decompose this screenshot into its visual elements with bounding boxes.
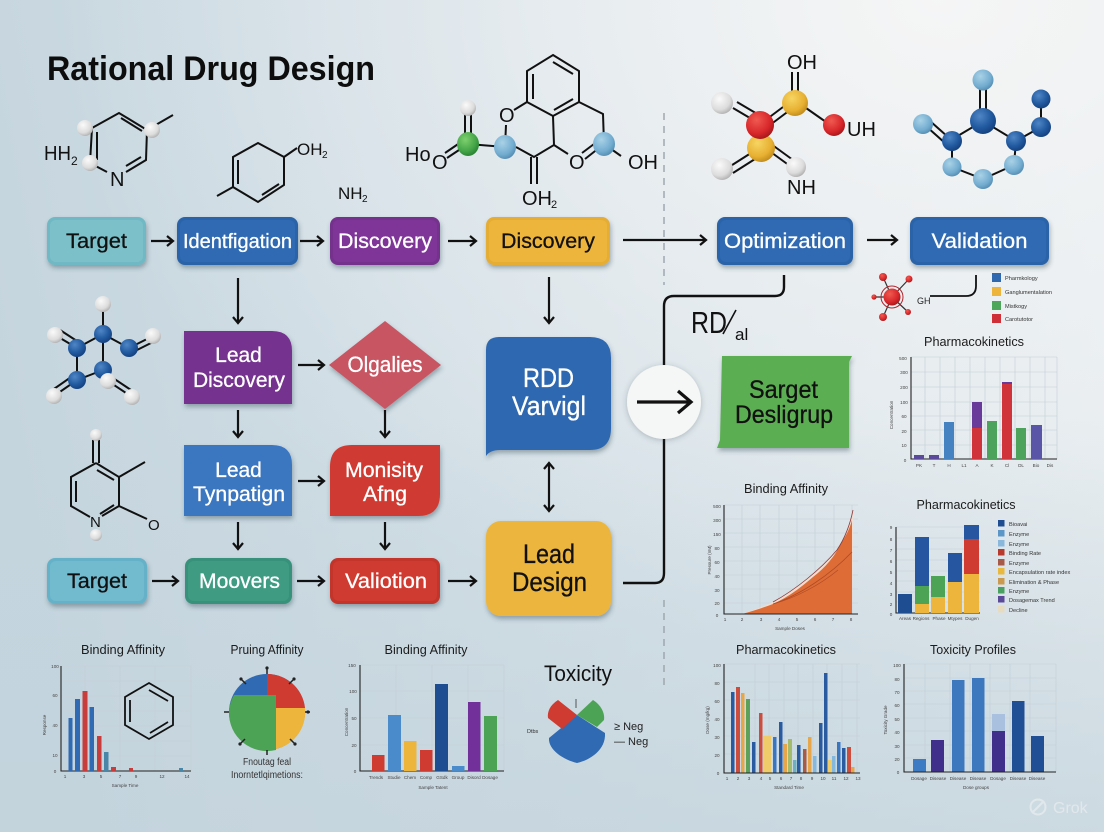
chart: stacked pharmacokinetics with legend: 5 (890, 570, 893, 575)
molecule: fused ring with coloured atoms: O (569, 152, 585, 174)
chart: binding affinity area: 150 (713, 532, 721, 537)
flow box: Target: Target (66, 230, 127, 253)
flow box: Discovery purple (330, 217, 440, 265)
stacked chart legend: Enzyme (1009, 589, 1029, 595)
chart: toxicity profiles: 100 (893, 663, 901, 668)
flow box: Validation: Validation (932, 230, 1028, 253)
chart: pharmacokinetics upper right: Cl (1005, 463, 1009, 468)
stacked chart legend: Binding Rate (1009, 551, 1041, 557)
molecule: fused ring with coloured atoms: OH (522, 188, 552, 210)
chart: toxicity pie (527, 661, 648, 763)
chart: binding affinity area: 500 (713, 504, 721, 509)
chart: toxicity pie: — Neg (614, 736, 648, 748)
chart: toxicity profiles: Disease (1029, 776, 1046, 781)
chart: toxicity profiles: 30 (894, 744, 900, 749)
chart: binding affinity bars with ring: 12 (159, 774, 165, 779)
chart: binding affinity bars: Binding Affinity (384, 643, 468, 657)
flow decision: Olgalies (329, 321, 441, 409)
molecule: pyridine lower: N (90, 514, 101, 531)
chart: toxicity profiles: 80 (894, 677, 900, 682)
stacked chart legend: Decline (1009, 608, 1028, 614)
chart: toxicity profiles: 0 (897, 770, 900, 775)
chart: binding affinity bars: Disord (467, 775, 481, 780)
flow box: Lead Tynpatign: Tynpatign (193, 483, 285, 506)
flow box: Monisity Afng: Afng (363, 483, 407, 506)
chart: pie pruning affinity (224, 643, 310, 781)
chart: binding affinity area: 4 (778, 617, 781, 622)
chart: pharmacokinetics upper right (889, 335, 1057, 468)
chart: binding affinity bars with ring: 5 (100, 774, 103, 779)
flow box: Discovery yellow: Discovery (501, 230, 596, 253)
chart: binding affinity bars with ring: 9 (135, 774, 138, 779)
chart title: Binding Affinity (81, 643, 166, 657)
chart: pharmacokinetics bottom: 60 (714, 699, 720, 704)
molecule: red and yellow atoms: UH (847, 119, 876, 141)
molecule: fused ring with coloured atoms: Ho (405, 144, 431, 166)
flow box: Identification (177, 217, 298, 265)
title: Rational Drug Design (47, 50, 375, 88)
chart: pharmacokinetics bottom: 0 (717, 771, 720, 776)
flow box: Sarget Desligrup: Sarget (749, 376, 818, 404)
chart: pharmacokinetics upper right: 300 (900, 370, 908, 375)
chart: binding affinity area: 5 (796, 617, 799, 622)
chart: stacked pharmacokinetics with legend: 3 (890, 592, 893, 597)
flow box: Discovery yellow (486, 217, 610, 265)
stacked chart legend: Enzyme (1009, 542, 1029, 548)
chart: binding affinity bars: 100 (349, 689, 357, 694)
chart: stacked pharmacokinetics with legend (890, 498, 1070, 621)
chart: stacked pharmacokinetics with legend: Areas (899, 616, 912, 621)
chart: pharmacokinetics upper right: A (975, 463, 979, 468)
chart: binding affinity bars with ring: 10 (52, 753, 58, 758)
flow box: Monisity Afng (330, 445, 440, 516)
chart: pie pruning affinity: Pruing Affinity (230, 643, 304, 657)
chart: stacked pharmacokinetics with legend: 6 (890, 559, 893, 564)
molecule: fused ring with coloured atoms (405, 55, 658, 211)
chart: toxicity profiles: Dosage (990, 776, 1006, 781)
chart: pharmacokinetics bottom: 2 (737, 776, 740, 781)
chart: binding affinity bars with ring: 1 (64, 774, 67, 779)
chart: pharmacokinetics bottom: 13 (855, 776, 861, 781)
chart: binding affinity area: 3 (760, 617, 763, 622)
chart: pharmacokinetics bottom: 40 (714, 717, 720, 722)
chart: pharmacokinetics upper right: 200 (900, 385, 908, 390)
chart: pharmacokinetics upper right: 10 (901, 443, 907, 448)
chart: pharmacokinetics bottom: 20 (714, 753, 720, 758)
chart: stacked pharmacokinetics with legend: Mtypes (948, 616, 963, 621)
chart: binding affinity bars: 150 (348, 663, 356, 668)
chart: pharmacokinetics bottom: 30 (714, 735, 720, 740)
chart: pharmacokinetics upper right: Dis (1047, 463, 1054, 468)
flow box: Lead Tynpatign: Lead (215, 459, 262, 482)
chart: binding affinity area: 80 (714, 546, 720, 551)
stacked chart legend: Bioavai (1009, 522, 1027, 528)
arrows between flow boxes (151, 240, 897, 581)
chart: pie pruning affinity: Inorntetlqimetions: (231, 770, 303, 781)
legend: validation: Carotutotor (1005, 317, 1033, 323)
label: NH2: NH (338, 184, 363, 203)
molecule: red and yellow atoms (711, 52, 876, 199)
chart: pharmacokinetics bottom: Pharmacokinetics (736, 643, 836, 657)
chart: pharmacokinetics bottom: 8 (800, 776, 803, 781)
watermark: Grok (1030, 800, 1089, 817)
chart: binding affinity bars: 50 (351, 716, 357, 721)
chart: binding affinity bars with ring: 40 (52, 723, 58, 728)
chart: binding affinity bars: Dosage (482, 775, 498, 780)
chart: binding affinity bars with ring: 60 (52, 693, 58, 698)
legend: validation: Ganglumentalation (1005, 290, 1052, 296)
chart: stacked pharmacokinetics with legend: 9 (890, 525, 893, 530)
chart: pharmacokinetics bottom: 9 (811, 776, 814, 781)
flow box: Lead Design: Lead (523, 539, 575, 569)
molecule: red and yellow atoms: NH (787, 177, 816, 199)
chart: stacked pharmacokinetics with legend: Pharmacokinetics (916, 498, 1016, 512)
chart: pharmacokinetics bottom: 80 (714, 681, 720, 686)
molecule: fused ring with coloured atoms: OH (628, 152, 658, 174)
dashed divider lower (663, 600, 665, 688)
flow box: Discovery purple: Discovery (338, 230, 433, 253)
chart: toxicity profiles: Disease (950, 776, 967, 781)
chart: binding affinity bars with ring: 3 (83, 774, 86, 779)
chart: binding affinity area: 40 (714, 574, 720, 579)
chart: pharmacokinetics upper right: K (990, 463, 994, 468)
chart: binding affinity area (707, 482, 858, 631)
chart: binding affinity area: 300 (713, 518, 721, 523)
flow box: Lead Discovery (184, 331, 292, 404)
chart: binding affinity bars: Studie (387, 775, 401, 780)
chart: pharmacokinetics upper right: 20 (901, 429, 907, 434)
chart: pharmacokinetics bottom: 5 (769, 776, 772, 781)
chart: pie pruning affinity: Fnoutag feal (243, 757, 291, 768)
chart: binding affinity bars with ring: 100 (51, 664, 59, 669)
chart: stacked pharmacokinetics with legend: Regions (913, 616, 930, 621)
flow box: Target lower: Target (67, 570, 127, 593)
label: NH2: 2 (362, 194, 368, 205)
flow box: Monisity Afng: Monisity (345, 459, 423, 482)
chart: toxicity pie: Dtbs (527, 729, 539, 735)
chart: pharmacokinetics upper right: Concentration (889, 400, 894, 429)
molecule: pyridine with white atoms (44, 113, 173, 191)
chart: pharmacokinetics upper right: 0 (904, 458, 907, 463)
stacked chart legend: Enzyme (1009, 532, 1029, 538)
chart: toxicity profiles: Dosage (911, 776, 927, 781)
circle arrow (627, 365, 701, 439)
dashed divider upper (663, 113, 665, 285)
connector: molecule to validation (930, 275, 976, 296)
legend: validation (992, 273, 1052, 323)
chart: toxicity profiles: Disease (930, 776, 947, 781)
chart: binding affinity bars: Chem (404, 775, 416, 780)
chart: pharmacokinetics bottom: Dose (mg/kg) (705, 706, 710, 734)
molecule: cyclohexadiene with OH2 (217, 140, 328, 202)
flow box: Optimization: Optimization (724, 230, 846, 253)
chart: binding affinity bars: Sample Tatent (418, 785, 448, 790)
molecule: small red: GH (917, 296, 930, 306)
flow box: Target lower (47, 558, 147, 604)
chart: binding affinity bars with ring: Sample Time (112, 783, 139, 788)
chart: toxicity profiles: Toxicity Profiles (930, 643, 1016, 657)
flow box: Sarget Desligrup (717, 356, 852, 448)
chart: binding affinity bars: 20 (351, 743, 357, 748)
chart: binding affinity area: 30 (714, 588, 720, 593)
flow box: RDD Varvigl: Varvigl (512, 391, 586, 421)
chart: pharmacokinetics upper right: PK (916, 463, 923, 468)
molecule: small red (871, 273, 930, 321)
chart: binding affinity bars with ring: 14 (184, 774, 190, 779)
chart: binding affinity area: 2 (741, 617, 744, 622)
chart: pharmacokinetics bottom: 1 (726, 776, 729, 781)
flow box: Identification: Identfigation (183, 231, 292, 253)
molecule: fused ring with coloured atoms: O (499, 105, 515, 127)
molecule: blue ring (913, 70, 1051, 189)
chart: pharmacokinetics bottom: 7 (790, 776, 793, 781)
chart: binding affinity area: 7 (832, 617, 835, 622)
flow box: RDD Varvigl: RDD (523, 363, 574, 393)
flow box: Lead Design (486, 521, 611, 616)
chart: binding affinity bars: 0 (354, 769, 357, 774)
chart: pharmacokinetics bottom: 3 (748, 776, 751, 781)
label: RD al: al (735, 325, 748, 344)
chart: binding affinity area: 1 (724, 617, 727, 622)
chart: stacked pharmacokinetics with legend: Dugen (965, 616, 979, 621)
chart: toxicity pie: ≥ Neg (614, 721, 643, 733)
chart: pharmacokinetics upper right: DL (1018, 463, 1024, 468)
flow box: Lead Discovery: Lead (215, 344, 262, 367)
molecule: pyridine lower (71, 429, 160, 541)
chart: toxicity profiles: Disease (1010, 776, 1027, 781)
chart: binding affinity bars: GSdk (436, 775, 448, 780)
chart: stacked pharmacokinetics with legend: Phase (932, 616, 946, 621)
stacked chart legend: Encapsulation rate index (1009, 570, 1070, 576)
chart: pharmacokinetics bottom: 10 (820, 776, 826, 781)
flow box: RDD Varvigl (486, 337, 611, 456)
ring molecule (125, 683, 173, 739)
chart: stacked pharmacokinetics with legend: 8 (890, 537, 893, 542)
watermark: Grok: Grok (1053, 800, 1089, 817)
chart: pharmacokinetics upper right: L1 (961, 463, 967, 468)
flow box: Lead Design: Design (512, 567, 587, 597)
chart: pharmacokinetics bottom: 12 (843, 776, 849, 781)
molecule: pyridine with white atoms: HH (44, 143, 71, 165)
chart: stacked pharmacokinetics with legend: 4 (890, 581, 893, 586)
stacked chart legend: Enzyme (1009, 561, 1029, 567)
chart: pharmacokinetics upper right: 500 (899, 356, 907, 361)
chart: toxicity profiles: Disease (970, 776, 987, 781)
chart: binding affinity bars: Comp (420, 775, 433, 780)
flow box: Valiotion: Valiotion (345, 570, 427, 593)
flow decision: Olgalies: Olgalies (348, 352, 422, 377)
chart: pharmacokinetics bottom: Standard Time (774, 785, 804, 790)
chart: pharmacokinetics bottom: 4 (760, 776, 763, 781)
chart: binding affinity bars (344, 643, 504, 790)
flow box: Valiotion (330, 558, 440, 604)
flow box: Target (47, 217, 146, 265)
flow box: Sarget Desligrup: Desligrup (735, 401, 833, 429)
legend: validation: Pharmkology (1005, 276, 1038, 282)
chart: binding affinity area: Pressure (nM) (707, 545, 712, 575)
chart: toxicity pie: Toxicity (544, 661, 612, 686)
chart: binding affinity area: 20 (714, 601, 720, 606)
flow box: Moovers: Moovers (199, 570, 280, 593)
chart: stacked pharmacokinetics with legend: 0 (890, 612, 893, 617)
chart: toxicity profiles: 40 (894, 730, 900, 735)
flow box: Validation (910, 217, 1049, 265)
stacked chart legend: Elimination & Phase (1009, 580, 1059, 586)
chart: stacked pharmacokinetics with legend: 7 (890, 548, 893, 553)
chart: binding affinity bars: Trends (369, 775, 384, 780)
chart: binding affinity area: 8 (850, 617, 853, 622)
chart: toxicity profiles: Dose groups (963, 785, 990, 790)
chart: binding affinity area: Binding Affinity (744, 482, 829, 496)
flow box: Optimization (717, 217, 853, 265)
flow box: Lead Tynpatign (184, 445, 292, 516)
label: RD al: RD (691, 305, 727, 340)
chart: toxicity profiles: 70 (894, 690, 900, 695)
chart: pharmacokinetics upper right: Pharmacokinetics (924, 335, 1024, 349)
molecule: pyridine lower: O (148, 517, 160, 534)
chart: toxicity profiles: 60 (894, 703, 900, 708)
connector line: optimization to lead design (623, 275, 784, 583)
chart: binding affinity bars: Concentration (344, 707, 349, 736)
chart: toxicity profiles: 20 (894, 757, 900, 762)
chart: toxicity profiles: Toxicity Grade (883, 705, 888, 735)
flow box: Lead Discovery: Discovery (193, 369, 285, 392)
chart: binding affinity bars with ring: Response (42, 714, 47, 735)
chart: binding affinity bars with ring: 0 (54, 769, 57, 774)
chart: pharmacokinetics upper right: 100 (900, 400, 908, 405)
molecule: blue and white left (46, 296, 161, 405)
molecule: cyclohexadiene with OH2: OH (297, 140, 322, 159)
chart: toxicity profiles: 50 (894, 717, 900, 722)
chart: pharmacokinetics upper right: H (947, 463, 951, 468)
molecule: pyridine with white atoms: N (110, 169, 124, 191)
chart: toxicity profiles (883, 643, 1056, 790)
chart: binding affinity area: Sample Doses (775, 626, 806, 631)
molecule: fused ring with coloured atoms: 2 (551, 199, 557, 211)
molecule: pyridine with white atoms: 2 (71, 154, 78, 168)
chart: pharmacokinetics bottom: 6 (780, 776, 783, 781)
flow box: Moovers (185, 558, 292, 604)
stacked chart legend: Dosagemax Trend (1009, 598, 1055, 604)
legend: validation: Mistkogy (1005, 304, 1027, 310)
molecule: cyclohexadiene with OH2: 2 (322, 150, 328, 161)
chart: binding affinity area: 6 (814, 617, 817, 622)
chart: binding affinity bars with ring: 7 (119, 774, 122, 779)
chart: pharmacokinetics upper right: 60 (901, 414, 907, 419)
molecule: red and yellow atoms: OH (787, 52, 817, 74)
chart: pharmacokinetics upper right: Bio (1033, 463, 1040, 468)
chart: stacked pharmacokinetics with legend: 2 (890, 602, 893, 607)
chart: binding affinity bars with ring (42, 643, 191, 788)
chart: pharmacokinetics bottom (705, 643, 861, 790)
chart: binding affinity area: 60 (714, 560, 720, 565)
stacked chart legend (998, 520, 1070, 614)
chart: binding affinity bars: Group (452, 775, 465, 780)
chart: pharmacokinetics upper right: T (933, 463, 936, 468)
chart: pharmacokinetics bottom: 100 (713, 663, 721, 668)
molecule: fused ring with coloured atoms: O (432, 152, 448, 174)
chart: pharmacokinetics bottom: 11 (832, 776, 837, 781)
chart: binding affinity area: 0 (716, 613, 719, 618)
